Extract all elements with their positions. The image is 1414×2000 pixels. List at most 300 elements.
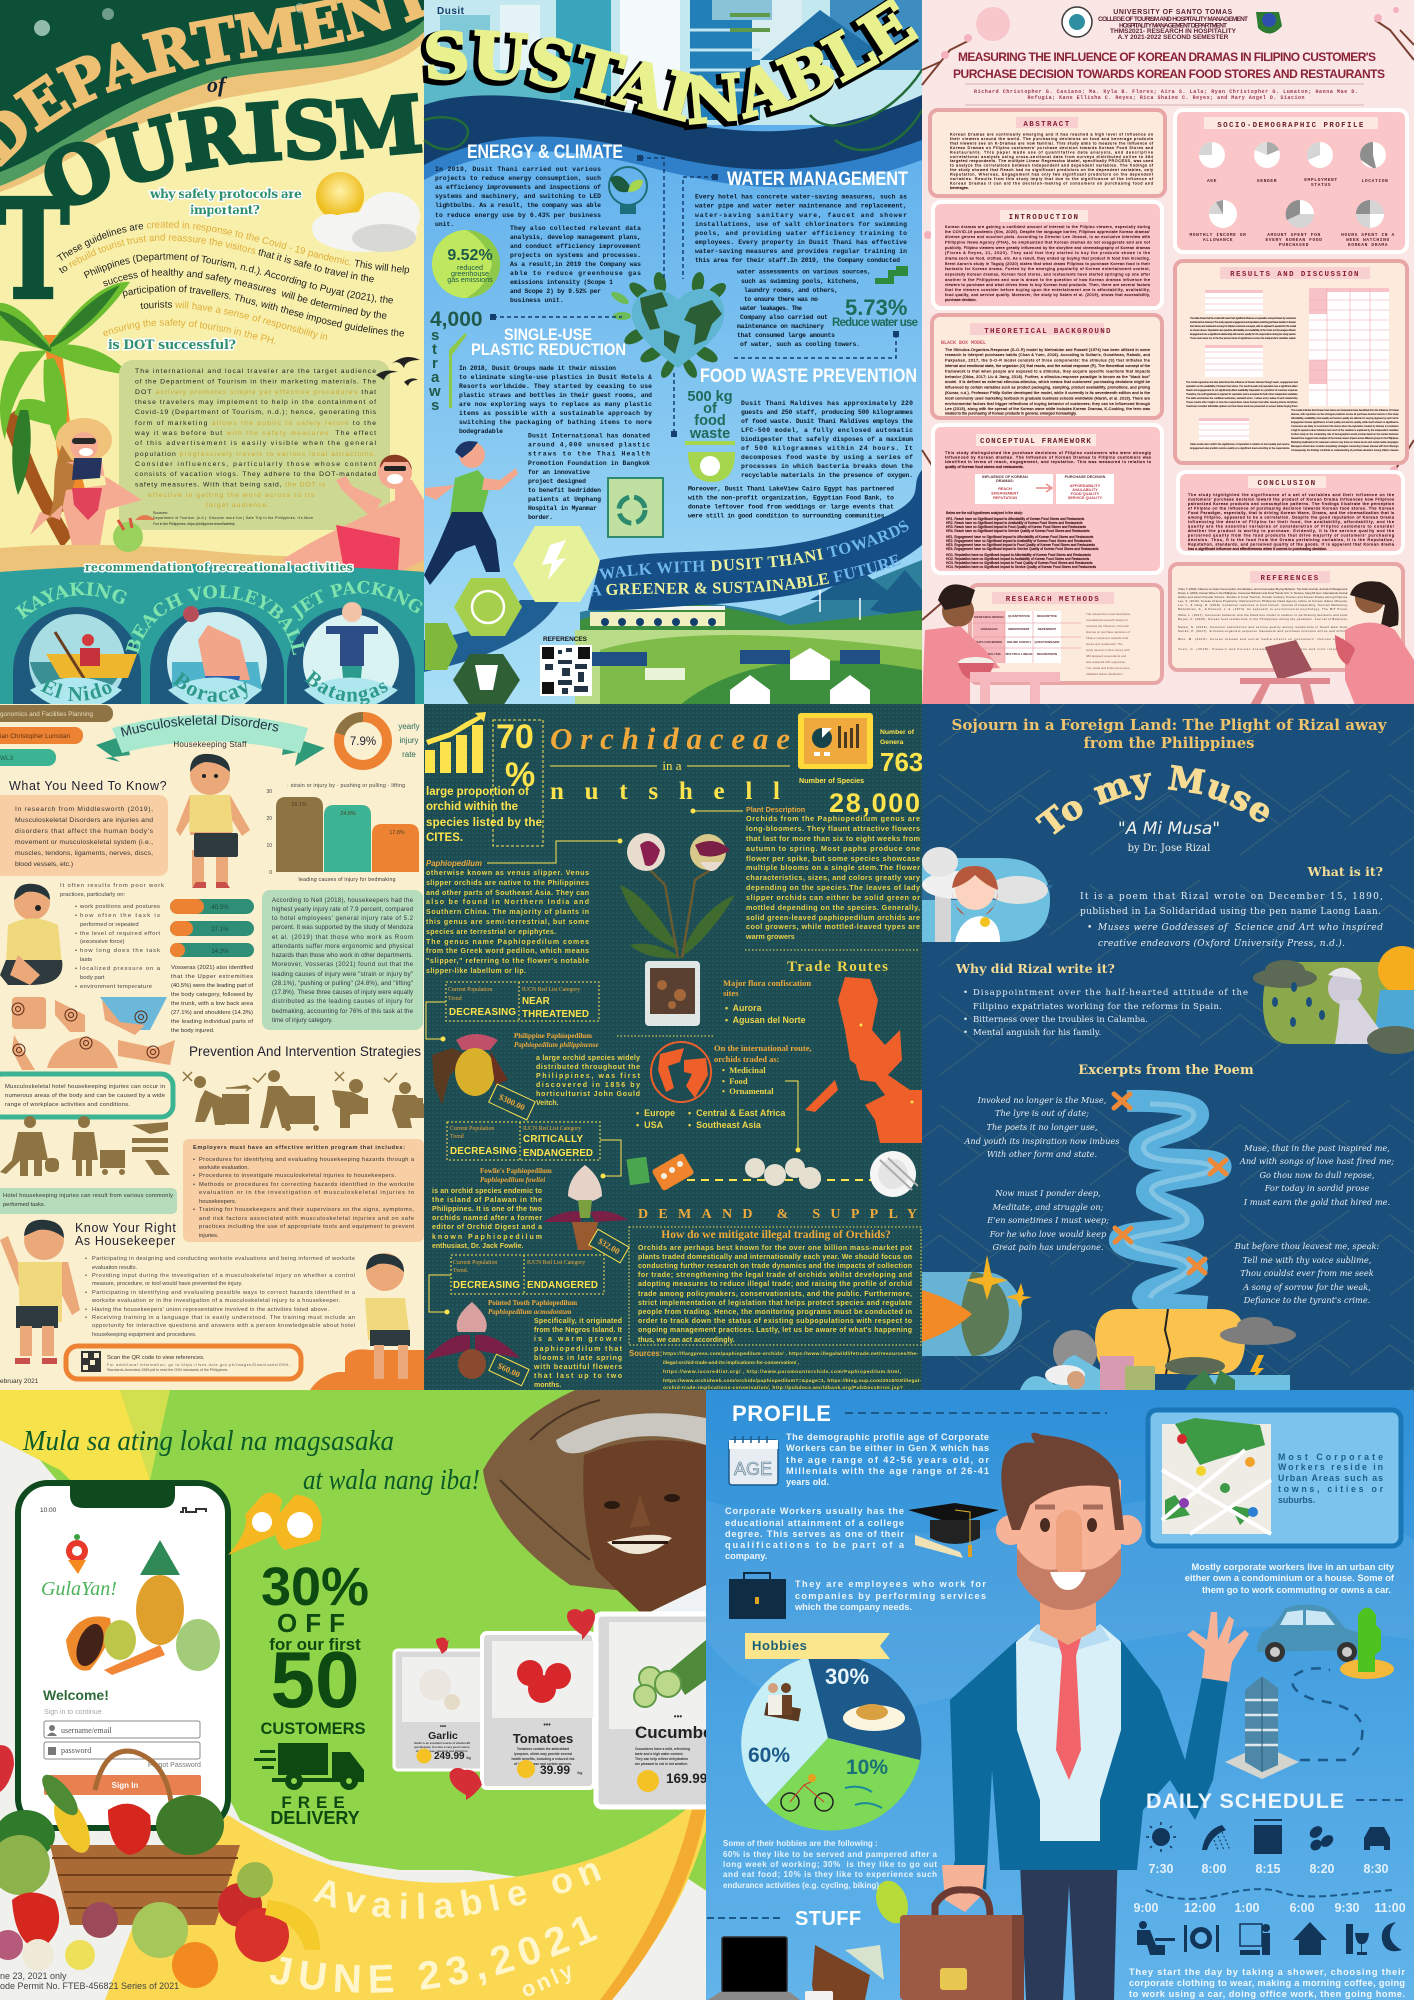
text: urban living: Mostly corporate workers live in an urban city	[1191, 1562, 1395, 1572]
text: urban living: them go to work commuting or owns a car.	[1202, 1585, 1391, 1595]
plant description: characteristics, sizes, and colors greatly vary	[746, 873, 920, 882]
text: Philippine paphiopedilum: discovered in 1856 by	[536, 1082, 640, 1089]
section: single-use plastic: PLASTIC REDUCTION	[471, 340, 626, 359]
progress bars: 14.3%	[211, 948, 229, 955]
box: research methods: VARIABLES	[980, 627, 998, 631]
section: what is it: •	[1087, 923, 1092, 933]
pie chart: hobbies: 30%	[825, 1664, 869, 1689]
body box: Consider influencers, particularly those whose content	[135, 461, 376, 468]
text: employees: which the company needs.	[794, 1602, 912, 1612]
poem excerpts right: For today in sordid prose	[1264, 1183, 1369, 1193]
box: results and discussion: Engagement shows significance in food quality and service quality, while reach shows no significance.	[1291, 421, 1399, 424]
heading: excerpts: Excerpts from the Poem	[1078, 1063, 1254, 1078]
icon: coconut drink	[113, 515, 155, 552]
text: Vosseras	[171, 965, 254, 1034]
box: socio-demographic profile: KOREAN DRAMA	[1348, 242, 1388, 248]
callout: teal outline	[0, 1074, 173, 1117]
text: hobbies: endurance activities (e.g. cycling, biking).	[723, 1881, 881, 1890]
text: pointed tooth: with beautiful flowers	[533, 1364, 622, 1371]
box: socio-demographic profile: GENDER	[1257, 178, 1277, 184]
box: socio-demographic profile: AMOUNT SPENT FOR	[1267, 232, 1321, 238]
stat: 5.73 percent: 5.73%	[845, 295, 907, 320]
box: conceptual framework: AFFORDABILITY	[1070, 484, 1101, 488]
box: research methods: DATA GATHERING	[976, 640, 1003, 644]
box: conclusion: quality are the essential variables of consideration of Filipino customers to consider	[1188, 524, 1395, 528]
box: theoretical background: THEORETICAL BACKGROUND	[984, 328, 1112, 336]
section: energy and climate: As a result,in 2019 the Company was	[510, 261, 641, 268]
product card: garlic: •••	[440, 1724, 446, 1730]
text: Vosseras: the leading individual parts of	[171, 1019, 253, 1025]
section: water management: Every hotel has concrete water-saving measures, such as	[695, 194, 907, 200]
headings: activity names: BEACH VOLLEYBALL	[126, 585, 305, 656]
box: conclusion: Food Paradigm, especially, that is driving Korean Wave, Drama, and the cinematization that is	[1188, 511, 1394, 515]
box: introduction: publicity. Filipino viewers were greatly influenced by the storyline and cinematography of Korean dramas	[945, 246, 1150, 250]
text: urban living	[1185, 1562, 1395, 1595]
box: references: Lee, S. (2019). Korean Drama Popularity. Retrieved from Philippine News Agency online on Korean drama influence.	[1178, 599, 1348, 603]
box: conceptual framework: HO3. Reputation have no Significant Impact to Food Quality of Korean Food Stores and Restaurants	[946, 561, 1093, 565]
mint text box: attendants suffer more ergonomic and physical	[272, 943, 413, 950]
bar chart: 28.1%	[291, 802, 307, 808]
map: globe and routes	[636, 1042, 812, 1152]
poem excerpts left: E'en sometimes I must weep;	[986, 1215, 1109, 1225]
sources: https://www.iucnredlist.org/ , http://www.paramountorchids.com/Paphiopedilum.html,	[663, 1369, 902, 1375]
icon: recycling bag	[608, 478, 663, 537]
paphiopedilum text: The genus name Paphiopedilum comes	[426, 939, 589, 946]
mint text box	[262, 890, 423, 1030]
status box 3: Trend.	[453, 1268, 469, 1274]
stats: genera and species: 28,000	[829, 788, 920, 818]
peach box: employers: Employers must have an effective written program that includes:	[193, 1145, 405, 1151]
section: single-use plastic: project designed	[528, 478, 586, 485]
product card: cucumber: 169.99	[666, 1771, 707, 1786]
text: causes list: It often results from poor work	[60, 883, 164, 889]
box: references: Yuen, C. (2018). Viewers and Korean dramas: purchase decisions and visit intentions.	[1178, 647, 1348, 651]
beard	[1017, 1548, 1121, 1610]
offer: 30 percent off: CUSTOMERS	[260, 1720, 366, 1738]
header: university: THMS2021- RESEARCH IN HOSPITALITY	[1110, 28, 1237, 35]
mint text box: According to Nell (2018), housekeepers had the	[272, 897, 414, 904]
section: single-use plastic: patients at Umphang	[528, 496, 601, 503]
box: references: Liu, Y., & Jiang, R. (2018). Consumer reactions to food stimuli. Journal of Hospitality, Tourism Marketing.	[1178, 603, 1348, 607]
character: sitting boy	[0, 884, 62, 985]
box: references: Woo, M. (2019). Korean dramas and social media effects on consumers' choices on food.	[1178, 637, 1348, 641]
map panel: Most Corporate	[1278, 1452, 1383, 1462]
section: food waste: of 500 kilogrammes within 24 hours. It	[741, 445, 913, 452]
icon: sun and cloud	[312, 172, 420, 252]
box: theoretical background: framework is that when people are exposed to a stimulus, they acquire specific reactions that impacts	[945, 370, 1150, 374]
poem excerpts right: Go thou now to dull repose,	[1259, 1170, 1375, 1180]
text: education	[725, 1506, 905, 1561]
box: conceptual framework: ENGAGEMENT	[991, 492, 1019, 496]
text: Philippine paphiopedilum: horticulturist John Gould	[536, 1091, 640, 1098]
poem excerpts right: Muse, that in the past inspired me,	[1243, 1143, 1390, 1153]
login form	[43, 1687, 201, 1795]
box: introduction: diverse genres and succinct plots. According to Director Lee Jinsoot, in an exclusive interview with	[945, 235, 1150, 239]
stat: 9.52 percent	[432, 230, 500, 298]
schedule times morning: 8:30	[1363, 1862, 1389, 1876]
peach box: employers: worksite evaluation.	[198, 1165, 249, 1171]
icon: AGE calendar: AGE	[734, 1459, 772, 1479]
poster title: PURCHASE DECISION TOWARDS KOREAN FOOD STORES AND RESTAURANTS	[953, 67, 1385, 81]
product card: garlic: Garlic is an excellent source of vitamin B6	[414, 1741, 470, 1745]
box: introduction: the COVID-19 pandemic (Kim, 2020). Despite the language barrier, Filipinos appreciate Korean dramas'	[945, 230, 1150, 234]
section: water management: of water, such as cooling towers.	[740, 341, 860, 348]
body box	[119, 360, 390, 530]
box: abstract	[930, 110, 1165, 196]
section: energy and climate: They also collected relevant data	[510, 225, 641, 232]
section: water management: water pipe and water meter maintenance and replacement,	[695, 202, 907, 210]
mint text box: hazards than those who work in other departments.	[272, 952, 413, 959]
heading: profile: PROFILE	[732, 1401, 832, 1426]
box: research methods: REGRESSION	[1037, 652, 1057, 656]
box: research methods	[970, 585, 1162, 683]
box: research methods: was analyzed with regression.	[1086, 660, 1126, 664]
mint text box: highest yearly injury rate of 7.9 percent, compared	[272, 906, 413, 913]
text: causes list: lasts	[80, 957, 92, 963]
schedule icons morning	[1146, 1820, 1390, 1854]
QR callout: Standards-Amended-1989.pdf to read the OSH standards of the Philippines.	[107, 1368, 228, 1372]
fine print	[0, 1971, 179, 1991]
box: conceptual framework: AVAILABILITY	[1072, 488, 1098, 492]
schedule icons later	[1137, 1921, 1402, 1955]
offer: 30 percent off: for our first	[269, 1635, 361, 1654]
hair	[1001, 1433, 1124, 1530]
schedule times morning: 7:30	[1148, 1862, 1174, 1876]
neck	[1040, 1595, 1096, 1645]
product card: tomatoes: 39.99	[540, 1763, 570, 1777]
mint text box: (28.1%), "pushing or pulling" (24.8%), and "lifting"	[272, 980, 413, 987]
section: what is it	[1080, 864, 1383, 949]
list: rights: opportunity for interactive questions and answers with a person knowledgeable about hotel	[92, 1323, 355, 1329]
box: results and discussion: Marketing implications for restaurant owners may focus on drama tie-ins and social media campaigns.	[1291, 441, 1399, 444]
activity card: beach volleyball: Boracay	[172, 671, 248, 702]
text: causes list: •	[75, 904, 77, 910]
box: conceptual framework: HR3. Reach have no Significant Impact to Food Quality of Korean Food Stores and Restaurants	[946, 525, 1086, 529]
heading: why safety protocols: important?	[190, 202, 260, 217]
box: mitigation: conducting further research on trade dynamics and the impacts of collection	[638, 1263, 912, 1270]
list: rights: housekeeping equipment and procedures.	[92, 1332, 197, 1338]
map: globe and routes: • Ornamental	[722, 1086, 774, 1096]
text: pointed tooth: from the Negros Island. It	[534, 1327, 623, 1334]
ribbon: walk with Dusit Thani	[588, 470, 922, 610]
box: research methods: The model and instruments were	[1086, 666, 1130, 670]
text: causes list: performed or repeated	[80, 922, 139, 928]
section: energy and climate	[432, 142, 664, 304]
headings: activity names: JET PACKING	[291, 580, 423, 621]
text: schedule paragraph: They start the day by taking a shower, choosing their	[1129, 1967, 1405, 1977]
box: conceptual framework: This study distinguished the purchase decisions of Filipino customers who were strongly	[945, 450, 1151, 455]
section: water management: water-saving sanitary ware, faucet and shower	[695, 212, 907, 219]
box: results and discussion: and the factors observed. The study supports engagement and reputation predicting purchase decision in Korean	[1190, 321, 1297, 324]
map: globe and routes: • Southeast Asia	[688, 1120, 762, 1130]
box: mitigation: How do we mitigate illegal trading of Orchids?	[661, 1229, 891, 1241]
peach box: employers: Methods or procedures for correcting hazards identified in the worksite	[199, 1182, 414, 1188]
illustration: pointed tooth orchid and price: $60.00	[496, 1361, 522, 1379]
banner: hobbies: Hobbies	[752, 1638, 807, 1653]
icon: growth chart	[425, 712, 486, 773]
section: why did Rizal write it: Filipino expatriates working for the reforms in Spain.	[973, 1002, 1222, 1012]
subtitle: A Mi Musa	[1118, 819, 1220, 854]
box: socio-demographic profile: PURCHASED	[1279, 242, 1309, 248]
phone mockup: 10:00	[40, 1507, 57, 1514]
box: conceptual framework: INFLUENCE OF KOREAN	[982, 475, 1028, 479]
section: why did Rizal write it: •	[963, 1028, 968, 1038]
peach box: employers: housekeepers.	[199, 1199, 237, 1205]
box: abstract: Restaurants. This paper made use of quantitative data analysis, and descriptive	[950, 150, 1153, 154]
stat: 4000 straws: w	[428, 383, 441, 400]
landscape	[575, 560, 922, 705]
ribbon: walk with Dusit Thani: WALK WITH DUSIT THANI TOWARDS	[598, 520, 909, 580]
section: water management: to ensure there was no	[744, 296, 818, 303]
product card: tomatoes: •••	[543, 1722, 551, 1729]
banner: hobbies	[745, 1633, 890, 1659]
character: corporate worker	[900, 1433, 1249, 2000]
box: conclusion: patronized Korean products and consumption patterns. The findings illustrate the perception	[1188, 502, 1394, 506]
pie chart: hobbies: 10%	[846, 1756, 888, 1779]
box: results and discussion: These results offer insight on how the respondents value Korean food after viewing drama storylines.	[1186, 401, 1298, 404]
box: research methods: validated before distribution.	[1086, 672, 1124, 676]
title: To my Muse: To my Muse	[1034, 764, 1270, 835]
status box 1: DECREASING	[449, 1007, 516, 1018]
list: rights: •	[85, 1315, 87, 1321]
poem excerpts left: Invoked no longer is the Muse,	[977, 1095, 1106, 1105]
bar chart: 24.8%	[340, 811, 356, 817]
paphiopedilum text: species are terrestrial or epiphytes.	[426, 929, 556, 936]
icon: graduation cap	[908, 1503, 999, 1558]
stat: 7.9 percent donut: yearly	[398, 722, 420, 731]
section: single-use plastic: bodegradable	[459, 428, 503, 435]
ribbon title: Musculoskeletal Disorders	[120, 714, 278, 737]
title: Sojourn: from the Philippines	[1084, 734, 1254, 752]
poem excerpts right: Defiance to the tyrant's crime.	[1243, 1295, 1370, 1305]
section: water management: such as swimming pools, kitchens,	[741, 278, 860, 285]
text: Fowlie's paphiopedilum: the island of Palawan in the	[432, 1197, 542, 1204]
box: introduction: Korean dramas are gaining a confident amount of interest to the Filipino viewers, especially during	[945, 225, 1150, 229]
section: food waste: FOOD WASTE PREVENTION	[700, 366, 917, 387]
heading: why safety protocols: why safety protocols are	[149, 186, 302, 201]
stat: 70 percent: CITES.	[426, 832, 463, 844]
callout: teal outline: numerous areas of the body and can be caused by a wide	[5, 1093, 166, 1099]
callout: mint: Hotel housekeeping injuries can result from various commonly	[3, 1193, 173, 1199]
text: hobbies: 60% is they like to be served and pampered after a	[723, 1850, 938, 1859]
stat: 500 kg food waste: food	[694, 413, 726, 429]
text: Philippine paphiopedilum: Veitch.	[536, 1100, 559, 1107]
box: socio-demographic profile: EVERY KOREAN FOOD	[1265, 237, 1323, 243]
icons: housekeeping	[0, 1116, 170, 1176]
section: single-use plastic: In 2018, Dusit Groups made it their mission	[459, 365, 616, 372]
poem excerpts left: Now must I ponder deep,	[994, 1188, 1101, 1198]
text: Vosseras: the body category, followed by	[171, 992, 253, 998]
body box: Department of Tourism. (n.d.). Discover more fun | Safe Trip in the Philippines. It's More	[153, 516, 313, 520]
heading: demand and supply: DEMAND & SUPPLY	[638, 1207, 917, 1222]
icons: demand and supply	[626, 1151, 918, 1197]
body box: population progressively travels to various local attractions.	[135, 451, 376, 458]
shirt	[1016, 1624, 1121, 1841]
map: globe and routes: • USA	[636, 1120, 664, 1130]
peach box: employers: Procedures for identifying and evaluating housekeeping hazards through a	[199, 1157, 415, 1163]
body box: these travelers may implement to help in the containment of	[135, 399, 376, 406]
section: food waste: processes in which bacteria breaks down the	[741, 463, 913, 470]
section: food waste: LFC-500 model, a fully enclosed automatic	[741, 427, 913, 434]
box: conclusion: influencing the desire of Filipino for their food, the availability, affordability, and the	[1188, 520, 1394, 524]
box: research methods: study used an online survey with	[1086, 648, 1130, 652]
app logo	[41, 1534, 117, 1600]
box: introduction: Philippine News Agency (PNA), he emphasized that Korean dramas do not exaggerate and are not	[945, 240, 1151, 244]
status box 2	[447, 1122, 621, 1178]
box: references	[1170, 564, 1403, 670]
body box: target audience.	[206, 502, 269, 509]
status box 3: ENDANGERED	[527, 1280, 598, 1291]
list: rights: Receiving training in a language that is easily understood. The training must include an	[92, 1315, 355, 1321]
product card: garlic: Garlic	[428, 1730, 458, 1742]
text: pointed tooth: months.	[534, 1382, 561, 1389]
heading: daily schedule: DAILY SCHEDULE	[1146, 1789, 1345, 1813]
box: research methods: 384 targeted respondents and	[1086, 654, 1126, 658]
stat: 70 percent: %	[505, 756, 535, 794]
poem excerpts right: A song of sorrow for the weak,	[1242, 1282, 1371, 1292]
status box 2: ENDANGERED	[523, 1148, 593, 1159]
phone mockup	[18, 1483, 228, 1828]
box: introduction: another in the Philippines and now is drawn to the question of how Korean dramas influence the	[945, 278, 1150, 282]
stat: 4000 straws: s	[431, 397, 439, 414]
text: employees: They are employees who work for	[795, 1579, 986, 1589]
body box: safety measures. With that being said, the DOT is	[135, 482, 326, 488]
box: theoretical background: research to interpret purchases habits (Chan & Yuen, 2018). According to Sultan's, Gunathnan, Raissib, and	[945, 353, 1150, 357]
box: introduction: (Flores & Reyes, 21, 2020). They said that they started to buy the products shown in the	[945, 251, 1150, 255]
box: research methods: correlational research design to	[1086, 618, 1128, 622]
product card: tomatoes: Tomatoes	[513, 1731, 573, 1746]
poem excerpts left	[964, 1095, 1119, 1252]
offer: 30 percent off: DELIVERY	[270, 1808, 360, 1828]
box: conceptual framework: Below are the null hypotheses analyzed in the study:	[946, 511, 1023, 515]
product card: tomatoes: /kg	[577, 1770, 582, 1775]
text: age profile: the age range of 42-56 years old, or	[786, 1455, 989, 1465]
box: socio-demographic profile	[1175, 110, 1407, 252]
schedule times later: 6:00	[1289, 1901, 1315, 1915]
box: references: REFERENCES	[1260, 575, 1320, 583]
box: results and discussion: Customers consider affordable options and how these foods are presented on screen before buying them.	[1186, 405, 1298, 408]
box: introduction: fantastic for Korean drama. Fueled by the emerging popularity of Korean entertainment content,	[945, 267, 1150, 271]
schedule times later: 9:00	[1133, 1901, 1159, 1915]
title: Orchidaceae	[550, 721, 790, 805]
text: employees: companies by performing services	[795, 1591, 986, 1601]
text: causes list: body part	[80, 975, 105, 981]
section: energy and climate: able to reduce greenhouse gas	[510, 270, 641, 277]
trade routes: • Aurora	[725, 1003, 762, 1013]
box: socio-demographic profile: ALLOWANCE	[1203, 237, 1233, 243]
plant description	[690, 805, 920, 941]
box: abstract: targeted respondents. The multiple Linear Regression Model, specifically PROCESS, was used	[950, 159, 1153, 163]
text: causes list	[60, 883, 164, 990]
icon: palm trees	[0, 282, 130, 548]
box: socio-demographic profile: EMPLOYMENT	[1304, 177, 1338, 183]
panel: corporate workers	[706, 1390, 1414, 2000]
peach text box: In research from Middlesworth (2019),	[15, 806, 153, 813]
box: theoretical background: The Stimulus-Organism-Response (S-O-R) model by Mehrabian and Russell (1974) has been utilized in some	[945, 348, 1150, 352]
bar chart	[266, 783, 419, 883]
box: results and discussion: food stores and restaurants among the Filipino customers surveyed, with an adjusted R-squared for the model	[1190, 325, 1296, 328]
trade routes: • Agusan del Norte	[725, 1015, 806, 1025]
route dashed line	[1292, 1668, 1362, 1760]
product card: garlic: 249.99	[434, 1751, 465, 1762]
illustration: Fowlie's orchid and price: $32.00	[596, 1236, 622, 1256]
section: energy and climate: business unit.	[510, 297, 564, 304]
box: theoretical background: (Kumar, n.d.). Professor Philip Kotler developed the model, while it currently is its seventeenth edition and is the	[945, 391, 1150, 395]
mint text box: percent. It was supported by the study of Mendoza	[272, 924, 414, 931]
icon: heart globe	[609, 271, 729, 380]
map panel: suburbs.	[1278, 1495, 1315, 1505]
map: globe and routes: • Europe	[636, 1108, 675, 1118]
text: causes list: •	[75, 931, 77, 937]
box: conclusion: CONCLUSION	[1257, 480, 1317, 488]
curved paragraph: to rebuild tourist trust and reassure the visitors that it is safe to travel in the	[59, 234, 374, 282]
text: age profile: years old.	[786, 1477, 829, 1487]
text: Fowlie's paphiopedilum: known Paphiopedilum	[432, 1234, 542, 1241]
box: theoretical background: related to the purchasing of Korean products in general, emerged increasingly.	[945, 412, 1077, 416]
box: mitigation: order to track down the status of existing subpopulations with respect to	[638, 1318, 912, 1325]
peach box: employers: Training for housekeepers and their supervisors on the signs, symptoms,	[199, 1207, 414, 1213]
holding hand and briefcase	[900, 1865, 1024, 2000]
box: theoretical background: behavior (Okka, 2017; Liu & Jiang, 2018). Further, a stimulus-response paradigm is known as the "black box"	[945, 375, 1151, 379]
header: university: COLLEGE OF TOURISM AND HOSPITALITY MANAGEMENT	[1098, 16, 1248, 23]
schedule times morning: 8:00	[1201, 1862, 1227, 1876]
QR callout: Scan the QR code to view references.	[107, 1355, 205, 1361]
name pills: WL3	[0, 755, 14, 762]
map panel: towns, cities or	[1278, 1484, 1384, 1494]
plant description: cool growers, while mottled-leaved types are	[746, 922, 920, 931]
product card: cucumber: They can help relieve dehydration	[635, 1757, 688, 1761]
stat: 500 kg food waste: of	[703, 401, 717, 417]
illustration: stars and circle	[922, 1255, 1032, 1356]
heading: know your right: As Housekeeper	[75, 1234, 176, 1248]
paphiopedilum text: otherwise known as venus slipper. Venus	[426, 870, 589, 877]
product card: cucumber: Cucumbers have a mild, refreshing	[635, 1747, 690, 1751]
peach box: employers: •	[193, 1173, 195, 1179]
text: pointed tooth: that last up to two	[534, 1373, 622, 1380]
poem excerpts left: And youth its inspiration now imbues	[964, 1136, 1119, 1146]
section: single-use plastic: border.	[528, 514, 553, 521]
box: introduction: that the viewers consider before buying upon the entertainment one is affordability, availability,	[945, 288, 1150, 292]
illustration: pointed tooth orchid and price	[425, 1302, 529, 1386]
box: research methods: examine the influence of Korean	[1086, 624, 1129, 628]
map: Philippines	[805, 977, 922, 1143]
box: mitigation: people from trading. Hence, the monitoring programs must be conducted in	[638, 1309, 912, 1316]
box: research methods: QUANTITATIVE	[1008, 614, 1030, 618]
text: pointed tooth: paphiopedilum that	[534, 1346, 623, 1353]
activity card: jet packing: Batangas	[304, 670, 388, 704]
character: waving boy	[0, 1220, 80, 1364]
title: Sojourn	[952, 716, 1388, 752]
section: water management: this area for their staff.In 2019, the Company conducted	[695, 257, 900, 264]
header: university: UNIVERSITY OF SANTO TOMAS	[1113, 9, 1233, 16]
text: Fowlie's paphiopedilum	[432, 1167, 552, 1250]
poem excerpts left: Great pain has undergone.	[992, 1242, 1104, 1252]
list: rights: •	[85, 1307, 87, 1313]
curved paragraph: participation of travellers. Thus, with these imposed guidelines the	[122, 284, 404, 336]
panel: GulaYan app	[0, 1390, 729, 2000]
box: introduction: Brent Aaron's study in Taguig (2020) states that what draws Filipinos to purchase Korean food is their	[945, 262, 1151, 266]
paphiopedilum text: this genus are semi-terrestrial, but some	[426, 919, 589, 926]
body box: of this advertisement is easily visible when the general	[135, 440, 376, 447]
callout: teal outline: range of workplace activities and conditions.	[5, 1102, 130, 1108]
status box 1: Current Population	[448, 987, 492, 993]
paphiopedilum text: from the Greek word pedilon, which means	[426, 948, 589, 955]
box: theoretical background: influenced by certain variables such as product packaging, sampling, product availability, promotions, and pricing	[945, 386, 1150, 390]
box: abstract: variables. Results from this study imply that due to the significance of the influence of	[950, 177, 1154, 181]
sources	[629, 1349, 921, 1391]
box: introduction: drama such as food, clothes, etc. As a result, they ended up buying that product in food trek including.	[945, 256, 1150, 260]
text: pointed tooth: Paphiopedilum acmodontum	[488, 1308, 572, 1316]
